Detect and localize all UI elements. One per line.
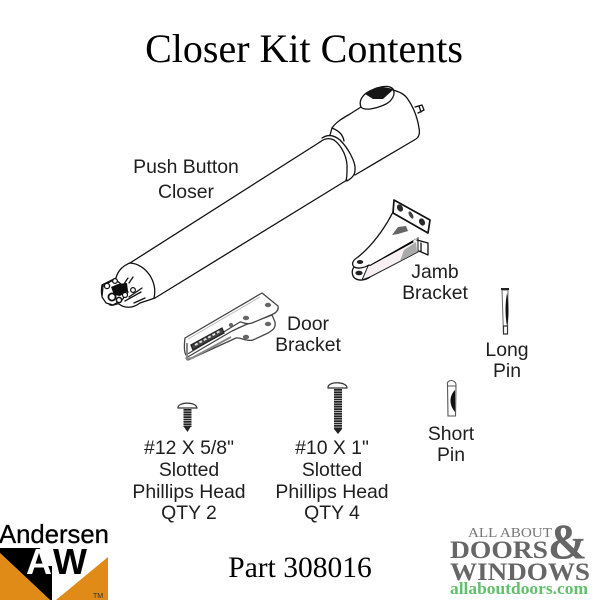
icon: door bracket <box>184 293 278 360</box>
label: small screw: QTY 2 <box>161 502 217 524</box>
label: long pin: Long <box>485 339 529 361</box>
label: large screw: Slotted <box>302 459 362 481</box>
lower arm <box>362 237 418 280</box>
label: short pin: Short <box>428 423 475 445</box>
logo: All About Doors & Windows: allaboutdoors.com <box>450 579 588 598</box>
icon: long pin <box>501 289 509 334</box>
label: door bracket <box>275 313 341 356</box>
logo: All About Doors & Windows: ALL ABOUT <box>468 526 552 541</box>
label: jamb bracket: Bracket <box>402 282 468 304</box>
logo: All About Doors & Windows: WINDOWS <box>450 559 590 586</box>
label: short pin: Pin <box>437 444 465 466</box>
end fittings <box>102 279 128 305</box>
logo: Andersen <box>0 521 109 600</box>
label: jamb bracket: Jamb <box>411 261 459 283</box>
label: door bracket: Bracket <box>275 334 341 356</box>
label: door bracket: Door <box>287 313 330 335</box>
icon: jamb bracket <box>352 200 430 280</box>
label: jamb bracket <box>402 261 468 304</box>
label: push button closer: Push Button <box>133 156 239 178</box>
triangular plate <box>353 212 426 268</box>
plate top flange <box>393 200 430 233</box>
label: small screw: #12 X 5/8" <box>144 437 234 459</box>
icon: push button closer <box>101 86 424 307</box>
logo: Andersen: TM <box>93 593 103 600</box>
icon: small screw <box>178 403 197 432</box>
logo: Andersen: Andersen <box>0 521 109 549</box>
label: small screw: Slotted <box>159 459 219 481</box>
label: large screw <box>275 437 389 524</box>
collar <box>320 139 347 180</box>
label: push button closer: Closer <box>158 181 215 203</box>
logo: All About Doors & Windows: DOORS <box>450 537 548 564</box>
logo: Andersen: W <box>53 541 87 582</box>
housing <box>332 90 419 175</box>
label: long pin <box>485 339 529 382</box>
logo: All About Doors & Windows <box>450 513 590 598</box>
label: short pin <box>428 423 475 466</box>
label: large screw: Phillips Head <box>275 481 389 503</box>
label: small screw <box>132 437 246 524</box>
label: push button closer <box>133 156 239 203</box>
logo: Andersen: A <box>26 541 52 582</box>
label: large screw: QTY 4 <box>304 502 360 524</box>
label: large screw: #10 X 1" <box>295 437 369 459</box>
button <box>360 86 394 109</box>
pivot eye <box>352 267 370 280</box>
title: Closer Kit Contents <box>145 26 463 71</box>
logo: All About Doors & Windows: & <box>548 513 587 569</box>
label: small screw: Phillips Head <box>132 481 246 503</box>
label: long pin: Pin <box>493 360 521 382</box>
icon: short pin <box>447 380 456 416</box>
icon: large screw <box>328 383 347 434</box>
part number: Part 308016 <box>228 552 372 584</box>
